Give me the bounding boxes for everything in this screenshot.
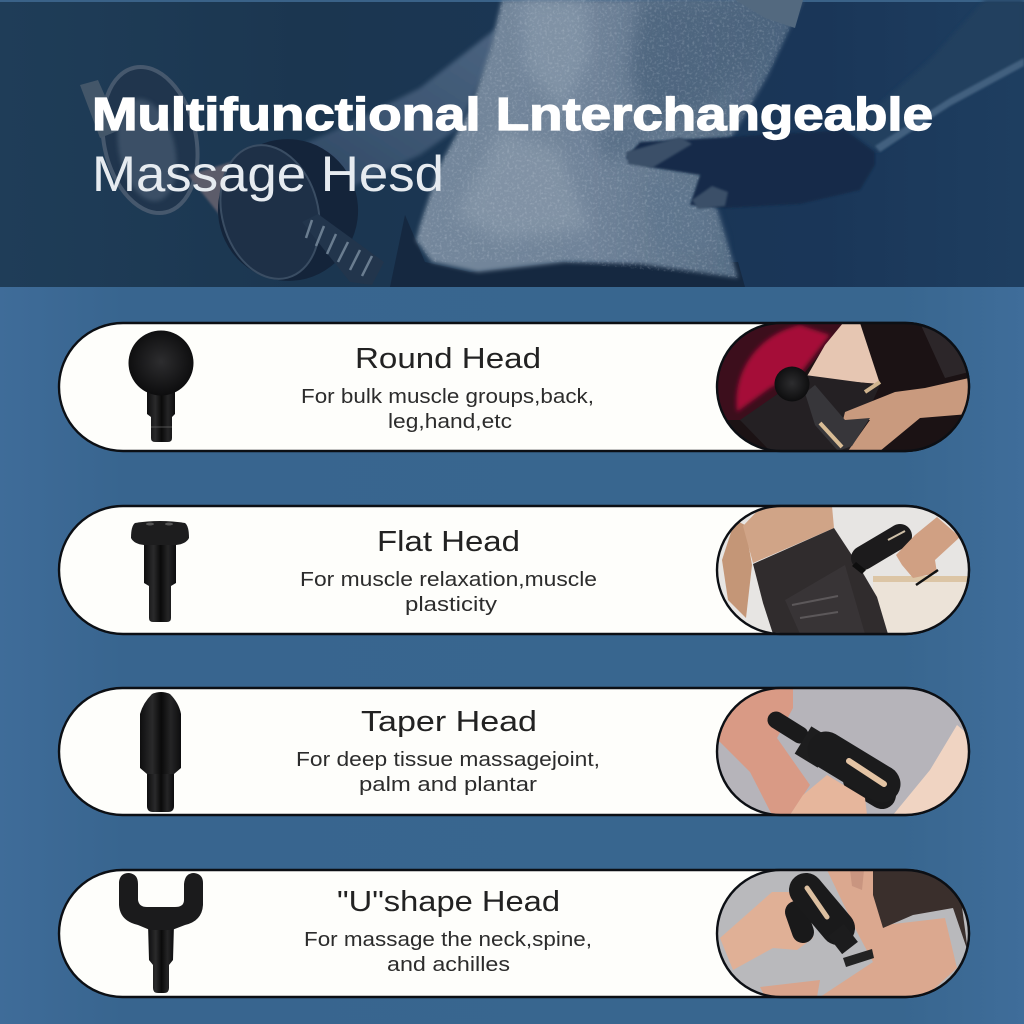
photo: flat head in use: [717, 506, 969, 634]
description: U-shape head: and achilles: [387, 954, 510, 976]
title: [92, 88, 933, 202]
title line 1: Multifunctional Lnterchangeable: [92, 88, 933, 140]
shorts: [390, 215, 745, 287]
description: U-shape head: [304, 929, 592, 976]
description: round head: leg,hand,etc: [388, 411, 512, 433]
panel: U-shape head: [59, 870, 969, 997]
torso shading: [461, 0, 744, 238]
heading: taper head: Taper Head: [361, 706, 537, 738]
torso: [416, 0, 803, 278]
water droplets: [416, 0, 803, 278]
dumbbell: [80, 65, 374, 281]
panel: taper head: [59, 688, 969, 815]
header photo: athlete with dumbbell: [0, 0, 1024, 297]
description: flat head: For muscle relaxation,muscle: [300, 569, 597, 591]
description: round head: [301, 386, 594, 433]
title line 2: Massage Hesd: [92, 146, 444, 202]
icon: U-shape massage head: [119, 873, 203, 993]
icon: round massage head: [128, 330, 194, 442]
description: round head: For bulk muscle groups,back,: [301, 386, 594, 408]
description: taper head: For deep tissue massagejoint,: [296, 749, 600, 771]
photo: U-shape head in use: [717, 870, 969, 997]
description: flat head: [300, 569, 597, 616]
panel: round head: [59, 323, 969, 451]
icon: taper massage head: [140, 692, 181, 812]
description: taper head: [296, 749, 600, 796]
sleeve: [735, 0, 803, 28]
right arm: [850, 0, 1024, 152]
heading: U-shape head: "U"shape Head: [337, 886, 560, 918]
hand on hip: [626, 130, 875, 208]
panel: flat head: [59, 506, 969, 634]
description: flat head: plasticity: [405, 594, 497, 616]
photo: round head in use: [717, 323, 969, 451]
heading: round head: Round Head: [355, 343, 541, 375]
photo: taper head in use: [717, 688, 969, 815]
icon: flat massage head: [131, 521, 189, 622]
heading: flat head: Flat Head: [377, 526, 520, 558]
left arm: [306, 30, 495, 186]
description: U-shape head: For massage the neck,spine,: [304, 929, 592, 951]
description: taper head: palm and plantar: [359, 774, 537, 796]
